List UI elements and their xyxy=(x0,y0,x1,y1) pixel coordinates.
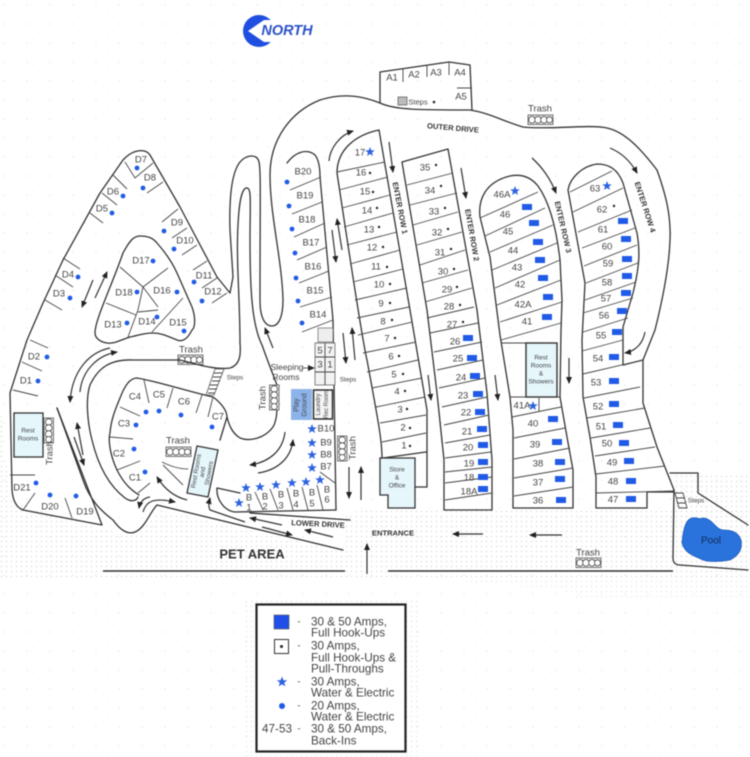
section D outer sites: D6 xyxy=(107,186,119,198)
trash: upper left xyxy=(178,344,203,364)
section B sites: 1 xyxy=(246,502,252,514)
sleeping rooms block: Rooms xyxy=(273,372,299,382)
store and office: & xyxy=(395,474,400,482)
section D island sites: D15 xyxy=(169,318,187,328)
enter row 2 sites: 28 xyxy=(444,302,454,312)
section B sites: 6 xyxy=(324,494,330,506)
enter row 4 sites: 56 xyxy=(599,310,609,322)
section B sites: B14 xyxy=(310,310,326,320)
section A sites: A5 xyxy=(455,92,467,102)
legend: full hook-ups: 30 & 50 Amps, xyxy=(311,616,387,628)
legend: water and electric star xyxy=(277,676,394,700)
steps label: Steps xyxy=(340,376,357,384)
section D outer sites: D19 xyxy=(76,506,94,518)
enter row 1 sites: 14 xyxy=(362,206,372,216)
legend: pull-throughs: Pull-Throughs xyxy=(311,662,384,676)
rest rooms and showers: section C: Rest Rooms xyxy=(190,453,203,489)
section C sites: C1 xyxy=(129,472,141,484)
section D outer sites: D2 xyxy=(28,352,40,362)
enter row 1 sites xyxy=(337,130,427,487)
section D island sites xyxy=(95,236,195,343)
section A sites: A3 xyxy=(430,68,442,78)
traffic arrows xyxy=(70,131,645,574)
play ground: Ground xyxy=(302,393,308,417)
enter row 3 sites: 39 xyxy=(530,440,540,450)
section B sites: 2 xyxy=(262,502,268,512)
enter row 1 sites: 2 xyxy=(400,422,406,434)
section B sites: B18 xyxy=(299,214,315,226)
section B sites: B xyxy=(262,492,268,502)
trash: section C: Trash xyxy=(166,436,190,446)
rest rooms and showers: section C: Showers xyxy=(203,461,214,486)
section D outer sites: D21 xyxy=(13,482,31,494)
enter row 3 sites: 44 xyxy=(508,246,518,256)
play ground xyxy=(291,389,312,420)
enter row 3 sites xyxy=(480,175,573,508)
north compass xyxy=(243,15,313,47)
trash: section C xyxy=(166,436,191,456)
section C sites xyxy=(109,378,277,495)
section C sites: C3 xyxy=(118,418,130,430)
sleeping rooms block: 1 xyxy=(327,360,333,370)
legend: full hook-ups: - xyxy=(297,616,301,628)
road labels xyxy=(219,518,414,562)
enter row 1 sites: 12 xyxy=(367,242,377,254)
enter row 2 sites: 33 xyxy=(429,206,439,218)
enter row 2 sites: 20 xyxy=(463,442,473,454)
section D island sites: D18 xyxy=(115,288,133,298)
rest rooms: left: Rooms xyxy=(18,436,39,442)
north compass: NORTH xyxy=(261,23,313,39)
laundry and rec room: Rec Room xyxy=(324,390,330,419)
rest rooms and showers: row 3: & xyxy=(539,370,544,378)
enter row 4 sites: 63 xyxy=(590,184,600,194)
enter row labels: ENTER ROW 1 xyxy=(391,181,410,235)
rest rooms and showers: row 3 xyxy=(526,343,557,397)
enter row 2 sites: 18 xyxy=(464,472,474,484)
section B sites: B20 xyxy=(295,166,311,178)
sleeping rooms block: 5 xyxy=(317,346,323,356)
enter row 2 sites: 26 xyxy=(450,336,460,348)
enter row 1 sites: 15 xyxy=(360,186,370,198)
trash: entrance road: Trash xyxy=(576,548,600,558)
legend: back-ins: - xyxy=(297,724,301,734)
legend: water and electric dot xyxy=(279,700,394,724)
laundry and rec room: Laundry xyxy=(316,394,322,415)
outer drive road: OUTER DRIVE xyxy=(427,121,479,135)
trash: left: Trash xyxy=(44,441,56,465)
store and office xyxy=(380,458,415,508)
section B sites: B19 xyxy=(297,190,313,202)
section B sites: B9 xyxy=(320,438,332,448)
legend: water and electric star: - xyxy=(297,676,301,688)
enter row 1 sites: 17 xyxy=(355,148,365,158)
rest rooms and showers: section C: and xyxy=(198,466,207,478)
pool area: Pool xyxy=(701,536,721,546)
section D island sites: D14 xyxy=(138,316,156,328)
enter row 4 sites: 62 xyxy=(597,204,607,216)
rest rooms: left: Rest xyxy=(21,428,35,434)
legend: pull-throughs: - xyxy=(297,640,301,652)
entrance road lines xyxy=(103,570,673,572)
enter row 2 sites: 30 xyxy=(438,266,448,278)
section B sites: B17 xyxy=(303,238,319,248)
section D outer sites xyxy=(10,151,227,525)
enter row 1 sites: 8 xyxy=(380,316,386,328)
enter row 2 sites: 21 xyxy=(462,426,472,438)
enter row 1 sites: 16 xyxy=(356,168,366,178)
trash: left xyxy=(44,418,56,465)
enter row labels: ENTER ROW 3 xyxy=(553,200,573,254)
enter row 4 sites: 57 xyxy=(601,294,611,304)
section D island sites: D16 xyxy=(153,286,171,296)
section B sites xyxy=(234,152,336,513)
enter row 4 sites: 48 xyxy=(608,476,618,488)
section D outer sites: D9 xyxy=(171,218,183,228)
enter row 4 sites: 54 xyxy=(593,354,603,364)
legend: full hook-ups: Full Hook-Ups xyxy=(311,626,385,640)
sleeping rooms block xyxy=(270,328,335,385)
legend: pull-throughs: 30 Amps, xyxy=(311,640,360,652)
enter row 2 sites: 24 xyxy=(456,372,466,384)
legend: back-ins xyxy=(262,722,387,748)
enter row 1 sites: 3 xyxy=(397,404,403,416)
enter row 1 sites: 5 xyxy=(391,370,397,380)
enter row 4 sites: 59 xyxy=(603,258,613,270)
enter row 4 sites: 58 xyxy=(602,278,612,288)
enter row 2 sites: 34 xyxy=(425,186,435,196)
section B sites: B xyxy=(246,492,252,504)
pool area: Steps xyxy=(688,498,705,504)
legend: water and electric dot: Water & Electric xyxy=(311,710,394,724)
enter row 4 sites: 49 xyxy=(607,458,617,468)
enter row 3 sites: 37 xyxy=(533,478,543,488)
enter row labels: ENTER ROW 2 xyxy=(463,208,481,262)
enter row 2 sites: 19 xyxy=(464,458,474,470)
enter row labels: ENTER ROW 4 xyxy=(633,181,658,234)
section B sites: B16 xyxy=(305,262,321,272)
sleeping rooms block: 7 xyxy=(327,346,333,356)
enter row 2 sites xyxy=(402,149,492,510)
section B sites: B15 xyxy=(307,286,323,296)
section A sites: Steps xyxy=(408,98,428,106)
store and office: Office xyxy=(389,482,406,490)
outer drive road xyxy=(217,96,670,385)
play ground: Play xyxy=(294,398,300,412)
legend: water and electric dot: 20 Amps, xyxy=(311,700,360,712)
enter row 2 sites: 29 xyxy=(442,284,452,296)
section C sites: C6 xyxy=(178,396,190,408)
legend: full hook-ups xyxy=(274,615,387,640)
enter row 1 sites: 11 xyxy=(371,262,381,272)
enter row 1 sites: 9 xyxy=(378,298,384,310)
enter row 1 sites: 7 xyxy=(384,334,390,344)
enter row labels xyxy=(391,181,658,262)
enter row 3 sites: 36 xyxy=(533,496,543,506)
section D outer sites: D10 xyxy=(176,236,194,246)
section A sites xyxy=(380,62,472,110)
enter row 1 sites: 4 xyxy=(394,386,400,398)
trash: outer drive: Trash xyxy=(528,104,552,114)
section C sites: C2 xyxy=(113,448,125,460)
trash: centre: Trash xyxy=(258,386,268,410)
enter row 1 sites: 13 xyxy=(364,224,374,236)
enter row 4 sites: 53 xyxy=(591,378,601,388)
rest rooms and showers: row 3: Showers xyxy=(528,378,554,386)
enter row 3 sites: 41 xyxy=(522,316,532,328)
section D island sites: D13 xyxy=(104,320,122,330)
legend: back-ins: 30 & 50 Amps, xyxy=(311,722,387,736)
road labels: LOWER DRIVE xyxy=(291,518,345,530)
enter row 2 sites: 22 xyxy=(461,408,471,418)
legend: back-ins: 47-53 xyxy=(262,722,292,736)
trash: outer drive xyxy=(528,104,553,124)
rest rooms and showers: section C xyxy=(187,446,218,497)
section B sites: B xyxy=(278,490,284,500)
section D outer sites: D7 xyxy=(135,154,147,166)
enter row 1 sites: 10 xyxy=(374,280,384,290)
section B sites: B10 xyxy=(318,424,334,434)
section D outer sites: D4 xyxy=(62,270,74,280)
legend: water and electric star: 30 Amps, xyxy=(311,676,360,688)
section B sites: B8 xyxy=(320,450,332,460)
trash: centre xyxy=(258,385,279,410)
section B sites: B xyxy=(324,484,330,496)
section D outer sites: D8 xyxy=(144,172,156,184)
enter row 4 sites: 50 xyxy=(602,438,612,450)
legend xyxy=(256,604,406,752)
enter row 2 sites: 18A xyxy=(461,486,478,498)
enter row 3 sites: 41A xyxy=(514,400,531,412)
section B sites: B7 xyxy=(320,462,332,472)
trash: right of section B: Trash xyxy=(348,436,358,460)
section D outer sites: D20 xyxy=(41,502,59,512)
trash: upper left: Trash xyxy=(179,344,203,356)
rest rooms and showers: row 3: Rooms xyxy=(531,362,552,370)
enter row 3 sites: 38 xyxy=(533,458,543,470)
enter row 2 sites: 23 xyxy=(458,390,468,402)
enter row 4 sites: 47 xyxy=(608,494,618,506)
section A sites: A1 xyxy=(386,72,398,84)
section B sites: B xyxy=(309,488,315,498)
pool area xyxy=(670,473,748,570)
middle road xyxy=(57,343,350,550)
section B sites: 5 xyxy=(309,498,315,510)
legend: water and electric dot: - xyxy=(297,700,301,712)
laundry and rec room xyxy=(314,390,332,419)
legend: water and electric star: Water & Electric xyxy=(311,686,394,700)
legend: back-ins: Back-Ins xyxy=(311,734,357,748)
sleeping rooms block: Sleeping xyxy=(270,362,304,372)
enter row 1 sites: 1 xyxy=(401,440,407,452)
enter row 4 sites: 55 xyxy=(596,330,606,342)
enter row 3 sites: 42 xyxy=(515,280,525,290)
enter row 3 sites: 43 xyxy=(512,262,522,274)
trash: right of section B xyxy=(338,436,358,461)
enter row 3 sites: 45 xyxy=(503,226,513,238)
enter row 4 sites: 51 xyxy=(596,422,606,432)
section A sites: A2 xyxy=(408,70,420,80)
section A sites: A4 xyxy=(454,68,466,78)
legend: pull-throughs: Full Hook-Ups & xyxy=(311,652,396,664)
enter row 3 sites: 46 xyxy=(500,210,510,220)
section D outer sites: D12 xyxy=(204,286,222,298)
section B sites: 4 xyxy=(293,500,299,510)
enter row 2 sites: 31 xyxy=(435,248,445,258)
trash: entrance road xyxy=(576,548,601,568)
enter row 2 sites: 27 xyxy=(447,320,457,330)
section B sites: B xyxy=(293,488,299,500)
legend: pull-throughs xyxy=(274,640,396,676)
enter row 4 sites: 60 xyxy=(602,242,612,252)
enter row 3 sites: 46A xyxy=(494,190,511,200)
enter row 2 sites: 32 xyxy=(432,228,442,238)
section B sites: 3 xyxy=(278,500,284,512)
enter row 3 sites: 40 xyxy=(528,418,538,430)
enter row 4 sites: 61 xyxy=(598,224,608,236)
enter row 1 sites: 6 xyxy=(388,352,394,362)
section D outer sites: D11 xyxy=(196,270,212,282)
store and office: Store xyxy=(389,466,405,474)
steps: section C xyxy=(206,369,244,395)
enter row 2 sites: 35 xyxy=(420,162,430,174)
steps: section C: Steps xyxy=(227,374,244,382)
road labels: ENTRANCE xyxy=(372,528,414,538)
section D island sites: D17 xyxy=(132,256,150,266)
sleeping rooms block: 3 xyxy=(317,360,323,370)
section C sites: C5 xyxy=(153,390,165,400)
section D outer sites: D5 xyxy=(96,204,108,214)
enter row 3 sites: 42A xyxy=(515,300,532,310)
section D outer sites: D1 xyxy=(20,376,32,386)
road labels: PET AREA xyxy=(219,546,285,562)
enter row 4 sites: 52 xyxy=(593,402,603,412)
enter row 2 sites: 25 xyxy=(453,354,463,364)
section D outer sites: D3 xyxy=(53,288,65,300)
rest rooms and showers: row 3: Rest xyxy=(534,354,548,362)
section C sites: C7 xyxy=(212,412,224,422)
enter row 4 sites xyxy=(568,164,674,508)
section C sites: C4 xyxy=(129,392,141,402)
rest rooms: left xyxy=(14,413,43,457)
